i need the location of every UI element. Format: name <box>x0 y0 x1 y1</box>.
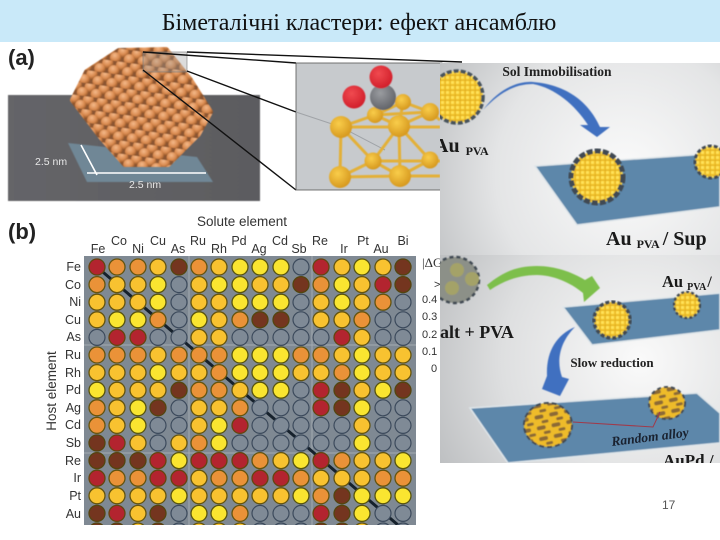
row labels: Re <box>65 454 81 468</box>
label: slow reduction: Slow reduction <box>570 355 654 370</box>
row labels: Co <box>65 278 81 292</box>
label: sol immobilisation: Sol Immobilisation <box>502 64 612 79</box>
legend labels: 0.3 <box>422 311 437 323</box>
row labels: Fe <box>66 260 81 274</box>
row labels <box>66 262 81 518</box>
column labels <box>91 234 409 256</box>
column labels: Pt <box>357 234 369 248</box>
column labels: Pd <box>231 234 247 248</box>
legend labels: 0.4 <box>422 294 437 306</box>
label: salt + PVA: alt + PVA <box>440 322 514 342</box>
callout lines <box>573 412 660 427</box>
icon: plate 2 small particle <box>674 292 700 318</box>
row labels: Pd <box>66 383 81 397</box>
icon: metal salt cluster <box>431 257 479 303</box>
grey floor <box>8 95 260 201</box>
row labels: Ir <box>73 471 81 485</box>
arrow: green curved <box>487 266 600 302</box>
diagonal line <box>97 267 405 531</box>
inset: atomic structure <box>296 63 442 190</box>
legend labels: |ΔG <box>422 255 442 270</box>
background bottom <box>440 255 720 463</box>
row labels: As <box>66 330 81 344</box>
page number: 17 <box>662 498 676 512</box>
label: (a): (a) <box>8 45 35 70</box>
zoom box <box>143 52 187 72</box>
support plate 1 <box>535 153 720 225</box>
label: Au PVA second: Au <box>662 272 683 291</box>
column labels: Au <box>373 242 389 256</box>
column labels: Cu <box>150 234 166 248</box>
separators <box>84 256 416 526</box>
row labels: Bi <box>70 524 81 538</box>
column labels: Co <box>111 234 127 248</box>
label: 2.5 nm left: 2.5 nm <box>35 156 67 168</box>
label: AuPd /: AuPd / <box>663 451 714 470</box>
column labels: Re <box>312 234 328 248</box>
column labels: Ir <box>340 242 348 256</box>
column labels: As <box>171 242 185 256</box>
row labels: Pt <box>69 489 82 503</box>
matrix circles <box>89 259 411 539</box>
row labels: Cd <box>65 418 81 432</box>
label: Au PVA / Support: PVA <box>637 237 660 251</box>
label: (b): (b) <box>8 219 36 244</box>
arrow: blue down <box>542 327 575 396</box>
legend labels: 0.2 <box>422 329 437 341</box>
column labels: Bi <box>397 234 409 248</box>
column labels: Cd <box>272 234 288 248</box>
panel: (a) nanocluster <box>8 45 462 201</box>
panel: (b) heat map <box>8 214 442 539</box>
icon: plate 2 large particle <box>594 302 630 338</box>
arrow: blue curved <box>483 82 610 137</box>
panel: sol immobilisation scheme <box>431 63 720 470</box>
column labels: Ru <box>190 234 206 248</box>
support plate 3 <box>470 393 720 463</box>
row labels: Ni <box>69 295 81 309</box>
label: 2.5 nm bottom: 2.5 nm <box>129 179 161 191</box>
chart background <box>84 256 416 526</box>
dimension arrows <box>81 145 206 175</box>
label: Au PVA / Support: Au <box>606 228 632 250</box>
label: Au PVA second: PVA <box>687 282 707 293</box>
label: Au PVA second: / <box>706 274 712 291</box>
connector lines <box>143 52 462 190</box>
icon: alloy particle large <box>524 403 572 447</box>
title: Біметалічні кластери: ефект ансамблю <box>162 10 556 36</box>
icon: supported particle small <box>695 146 720 178</box>
icon: atom cluster <box>73 50 210 164</box>
support plate 2 <box>563 293 720 345</box>
icon: alloy particle small <box>649 387 685 419</box>
axis title: solute element: Solute element <box>197 214 287 229</box>
column labels: Ag <box>251 242 267 256</box>
support plate <box>68 143 213 182</box>
legend labels <box>422 258 440 372</box>
row labels: Sb <box>66 436 81 450</box>
label: random alloy: Random alloy <box>610 425 690 449</box>
column labels: Rh <box>211 242 227 256</box>
column labels: Ni <box>132 242 144 256</box>
legend labels: 0.1 <box>422 346 437 358</box>
row labels: Au <box>66 507 81 521</box>
icon: supported particle large <box>571 151 623 203</box>
row labels: Rh <box>65 366 81 380</box>
axis title: host element: Host element <box>44 351 59 431</box>
background top <box>440 63 720 255</box>
label: Au PVA / Support: / Sup <box>662 228 707 250</box>
label: Au PVA: PVA <box>466 144 489 158</box>
column labels: Fe <box>91 242 105 256</box>
legend labels: 0 <box>431 363 437 375</box>
title band <box>0 0 720 42</box>
column labels: Sb <box>291 242 307 256</box>
row labels: Ru <box>65 348 81 362</box>
icon: Au PVA particle <box>431 71 483 123</box>
row labels: Cu <box>65 313 81 327</box>
row labels: Ag <box>66 401 81 415</box>
legend labels: > <box>434 279 440 291</box>
label: Au PVA: Au <box>434 135 460 157</box>
